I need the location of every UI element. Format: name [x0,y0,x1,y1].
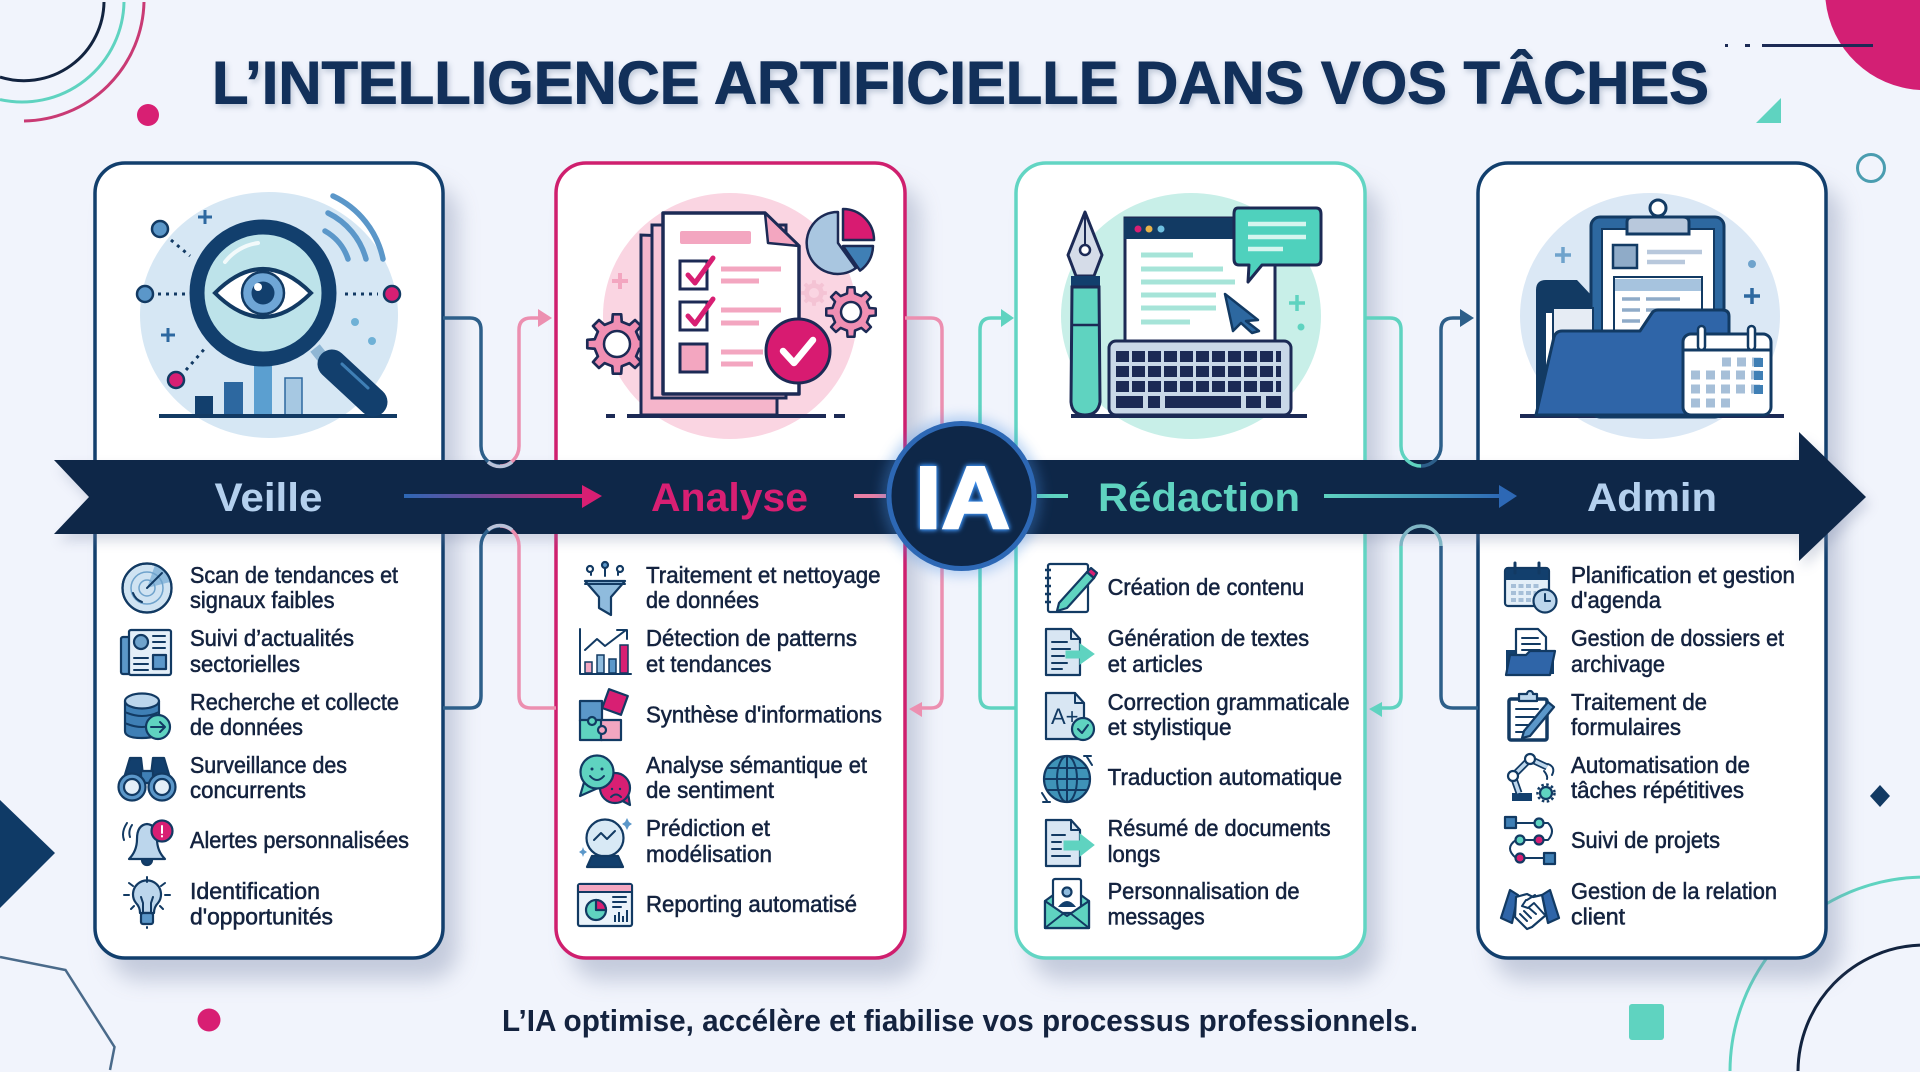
text: formulaires [1571,714,1681,740]
item: Dossiers [1506,625,1785,677]
item: Personnalisation [1045,878,1300,930]
panel: Analyse [556,163,920,980]
text: Automatisation de [1571,752,1750,778]
illustration: magnifying glass with eye [137,192,400,438]
text: Suivi d’actualités [190,625,354,651]
text: Génération de textes [1108,625,1309,651]
item: Correction [1046,689,1350,740]
item: Génération de textes [1046,625,1309,677]
text [1571,752,1750,803]
text: et tendances [646,651,772,677]
decorative: pink dot top-left [137,104,159,126]
arrow: Analyse to IA [854,494,886,498]
text [190,689,399,740]
icon: notebook and pen [1045,564,1097,612]
connector: Analyse to Rédaction bottom [909,545,1016,717]
icon: bell [123,820,172,865]
text: d'agenda [1571,587,1661,613]
text [646,815,772,867]
connector: Analyse to Rédaction top [905,309,1014,440]
item: Relation client [1501,878,1777,930]
label: Veille: Veille [214,476,322,520]
text: de données [190,714,303,740]
text: Synthèse d'informations [646,702,882,728]
item: Scan de tendances [122,562,399,613]
item: Recherche et collecte [125,689,399,740]
banner arrow [54,432,1870,568]
icon: binoculars [118,758,176,800]
text: et stylistique [1108,714,1232,740]
arrow: Veille to Analyse [404,485,602,508]
icon: crystal ball [579,818,632,867]
text: longs [1108,841,1160,867]
illustration: pen, browser and keyboard [1061,193,1321,439]
text: Traitement et nettoyage [646,562,880,588]
icon: globe [1042,756,1092,802]
icon: robot arm [1508,754,1554,802]
text: concurrents [190,777,306,803]
text [646,625,857,677]
text [646,562,880,613]
text: et articles [1108,651,1203,677]
connector: Rédaction to Admin top [1365,309,1474,466]
text [1108,815,1331,867]
text: Alertes personnalisées [190,827,409,853]
decorative: top-right line [1725,44,1873,47]
text: tâches répétitives [1571,777,1744,803]
panel: Veille [95,163,458,980]
connector: Rédaction to Admin bottom [1369,526,1478,717]
label: Rédaction: Rédaction [1098,476,1300,520]
icon: newspaper [121,630,171,675]
text [1571,689,1707,740]
decorative: top-right pink circle [1826,0,1920,90]
decorative: teal triangle [1756,98,1781,123]
icon: document A+ with check [1046,693,1094,740]
panel: Admin [1478,163,1841,980]
item: Formulaires [1509,689,1707,740]
item: Suivi de projets [1505,817,1720,864]
connector: Veille to Analyse top [443,309,552,466]
text: Planification et gestion [1571,562,1795,588]
text [1108,878,1300,930]
decorative: ring [1858,154,1884,182]
item: Analyse sémantique [580,752,868,805]
item: Détection [580,625,857,677]
text [190,752,347,803]
item: Résumé [1046,815,1331,867]
text: archivage [1571,651,1665,677]
text: Surveillance des [190,752,347,778]
text: Résumé de documents [1108,815,1331,841]
decorative: top-left arcs [0,2,144,121]
text [190,625,354,677]
decorative: hexagon outline [0,957,114,1070]
text: Prédiction et [646,815,771,841]
icon: document with arrow [1046,629,1094,675]
arrow: IA to Rédaction [1037,494,1068,498]
text: Recherche et collecte [190,689,399,715]
icon: funnel [585,562,625,615]
text [646,752,868,803]
text: d'opportunités [190,904,333,930]
text: sectorielles [190,651,300,677]
item: Automatisation [1508,752,1750,803]
decorative: bottom-right arcs [1730,877,1920,1071]
text: Gestion de dossiers et [1571,625,1785,651]
label: Analyse: Analyse [651,476,808,520]
text [190,878,333,930]
title: L’INTELLIGENCE ARTIFICIELLE DANS VOS TÂCHES [212,50,1709,116]
text: Personnalisation de [1108,878,1300,904]
icon: clipboard with pen [1509,691,1554,740]
item: Reporting [578,884,857,926]
decorative: teal square [1629,1004,1664,1040]
text [1108,625,1309,677]
icon: document with arrow [1046,820,1094,866]
text: messages [1108,904,1205,930]
text: de sentiment [646,777,775,803]
icon: handshake [1501,890,1559,929]
text: de données [646,587,759,613]
connector: Veille to Analyse bottom [443,526,556,708]
text: Scan de tendances et [190,562,399,588]
text [1571,625,1785,677]
text: signaux faibles [190,587,334,613]
IA badge: IA [915,448,1010,547]
icon: folder with document [1506,629,1555,675]
IA badge [882,416,1042,576]
item: Surveillance [118,752,347,803]
text: Gestion de la relation [1571,878,1777,904]
item: Alertes [123,820,409,865]
illustration: clipboard, folder and calendar [1520,193,1784,439]
item: Traitement [585,562,880,615]
icon: dashboard [578,884,632,926]
icon: trend chart [580,629,631,674]
icon: document A+ with check: A+ [1051,704,1079,729]
icon: database [125,694,170,739]
item: Création de contenu [1045,564,1304,612]
text: Création de contenu [1108,574,1304,600]
text: Reporting automatisé [646,891,857,917]
item: Synthèse [580,689,882,740]
icon: envelope with profile [1045,879,1089,928]
illustration: checklist documents [587,193,876,439]
decorative: diamond [1870,785,1890,807]
arrow: Rédaction to Admin [1324,485,1517,508]
text [1108,689,1350,740]
item: Suivi d'actualités [121,625,354,677]
icon: light bulb [124,877,170,928]
panel: Rédaction [1016,163,1380,980]
decorative: left chevron [0,800,55,908]
icon: workflow [1505,817,1555,864]
text: Identification [190,878,320,904]
item: Traduction [1042,756,1342,802]
text: Traduction automatique [1108,764,1342,790]
icon: radar [122,564,172,612]
text [190,562,399,613]
text: Analyse sémantique et [646,752,868,778]
text: modélisation [646,841,772,867]
icon: puzzle [580,689,628,740]
text: client [1571,904,1626,930]
decorative: pink dot bottom [198,1008,220,1032]
icon: calendar and clock [1505,563,1556,612]
text: Traitement de [1571,689,1707,715]
label: Admin: Admin [1587,476,1717,520]
text: Suivi de projets [1571,827,1720,853]
text: Détection de patterns [646,625,857,651]
text [1571,878,1777,930]
item: Prédiction [579,815,772,867]
text: Correction grammaticale [1108,689,1350,715]
item: Planification [1505,562,1795,613]
item: Identification [124,877,333,930]
icon: emotion bubbles [580,756,630,805]
footer tagline: L’IA optimise, accélère et fiabilise vos processus professionnels. [502,1003,1418,1038]
text [1571,562,1795,613]
